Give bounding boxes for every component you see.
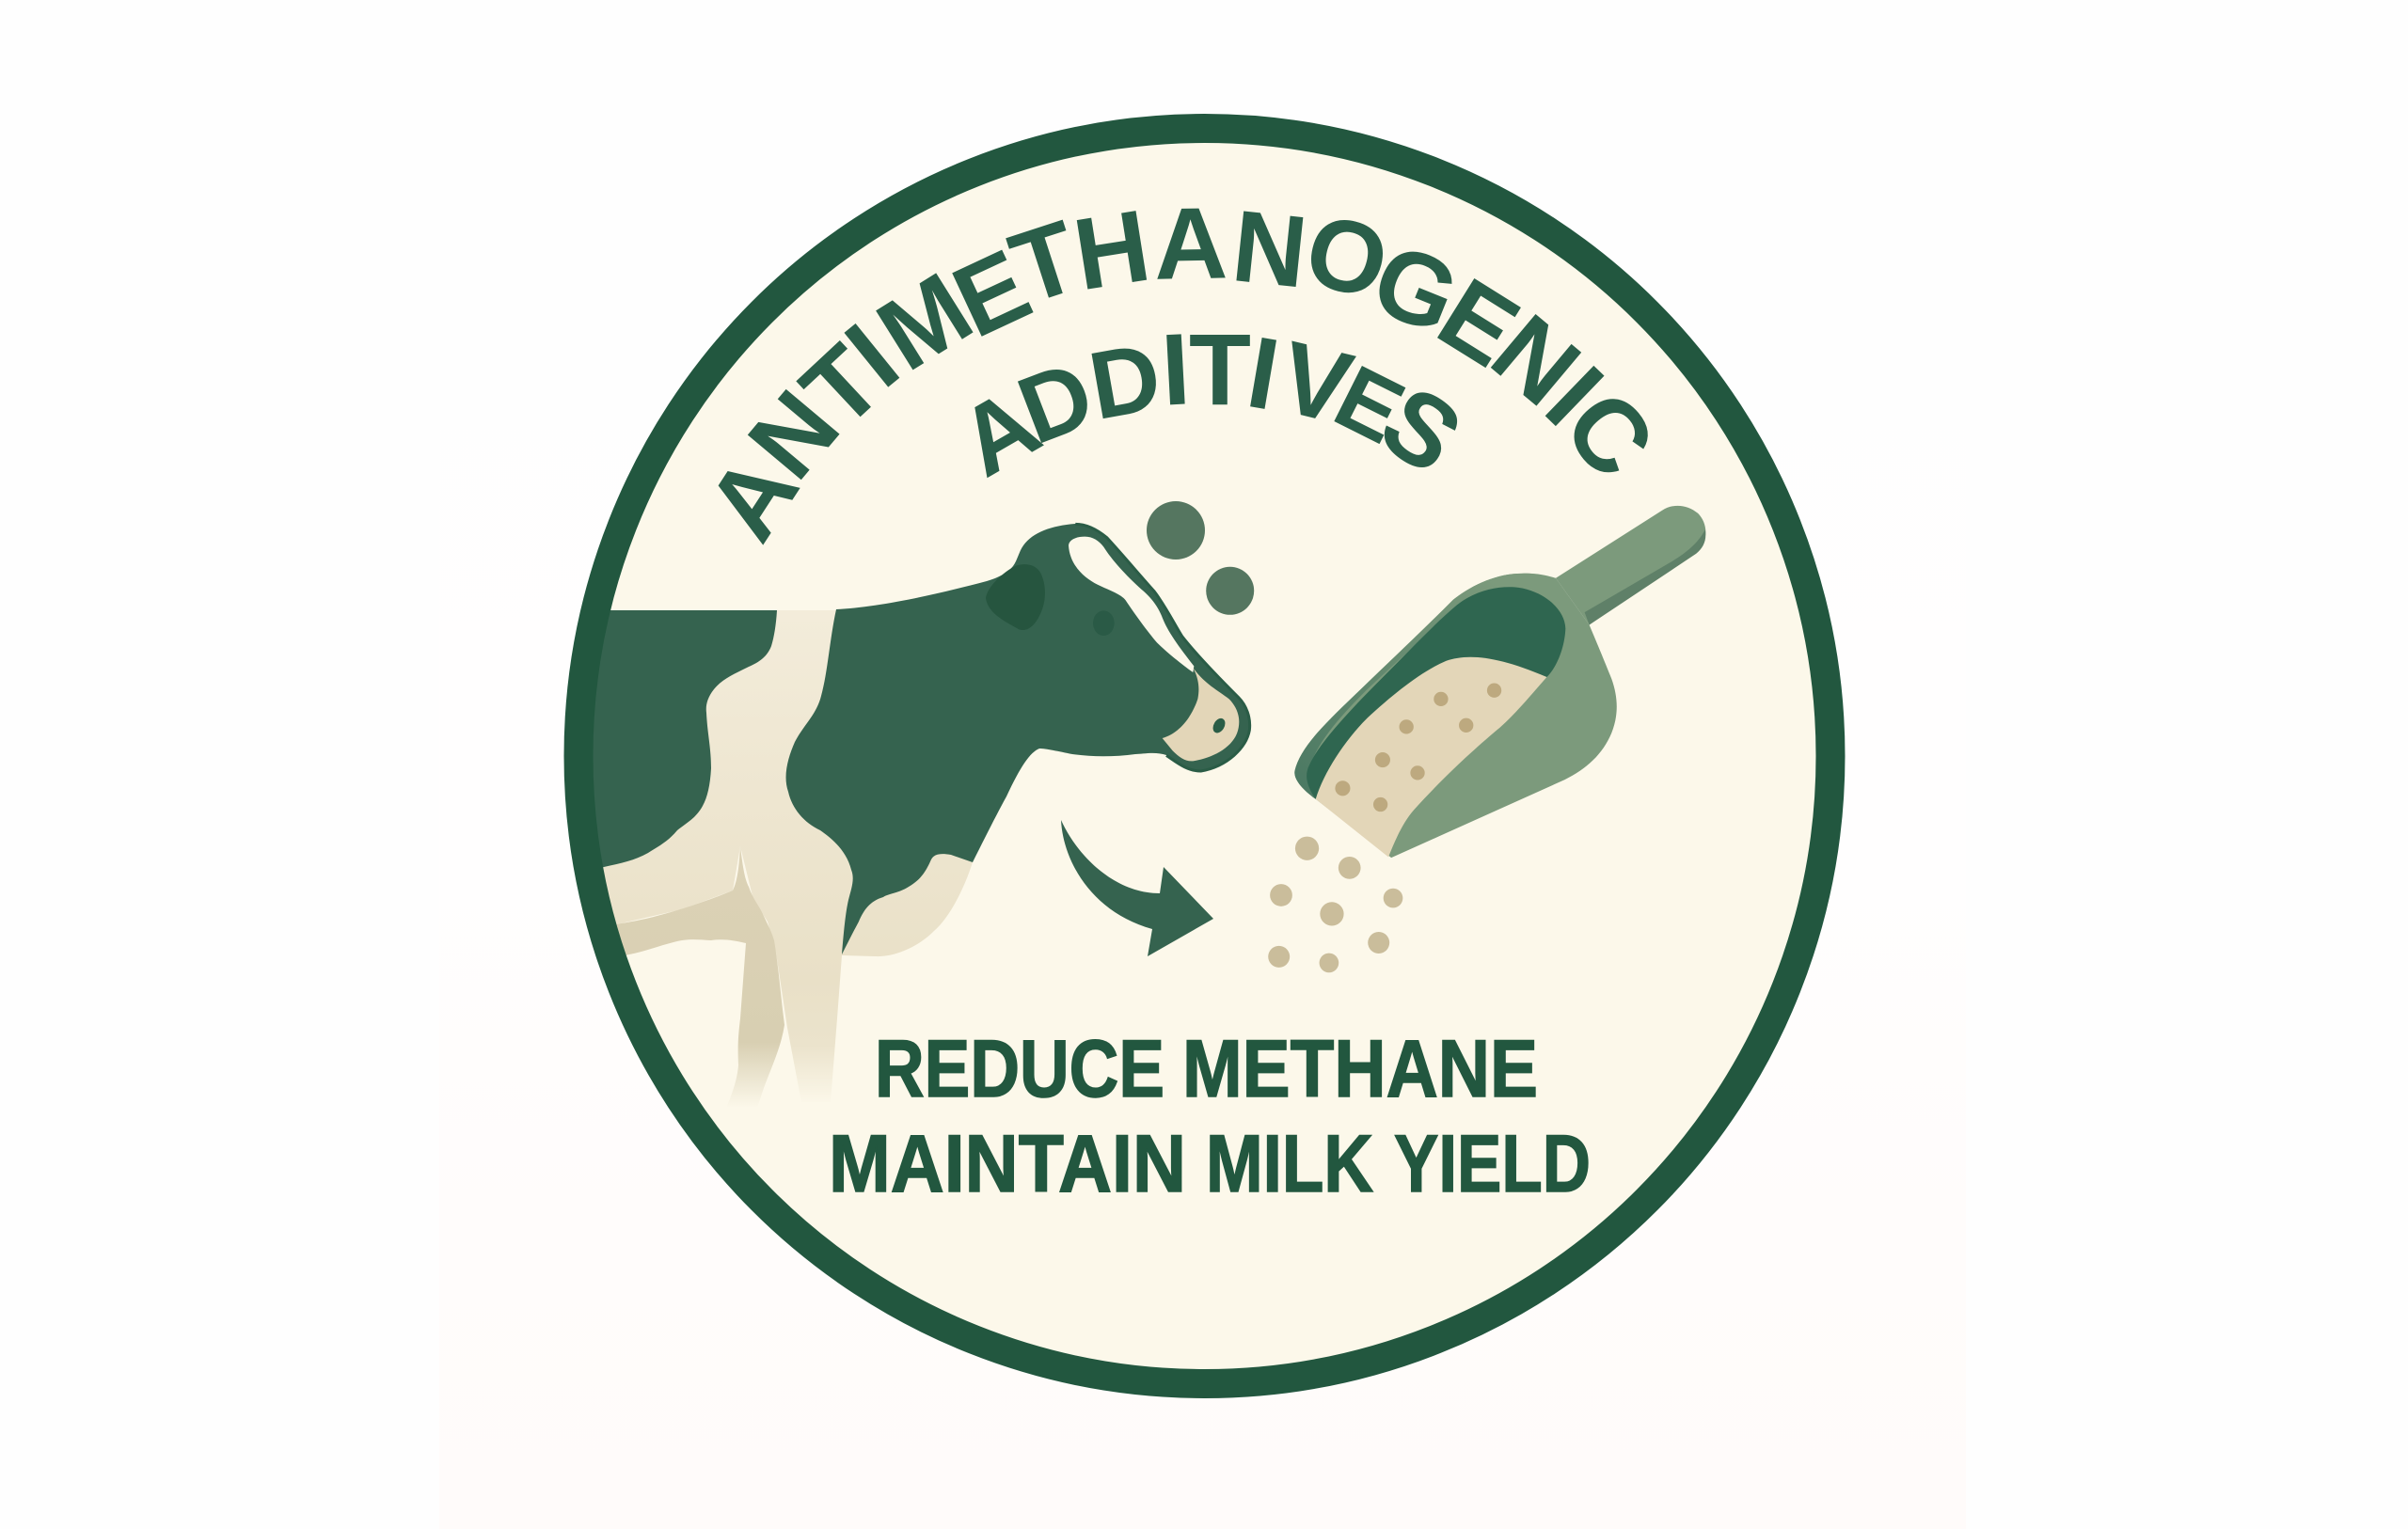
- panel: circular badge: [564, 128, 1830, 1384]
- bubble large: [1147, 501, 1205, 560]
- additive powder: [1316, 657, 1546, 857]
- cow shaded back leg: [617, 847, 784, 1098]
- badge cream disc: [578, 128, 1830, 1384]
- message two: YIELD: [1394, 1119, 1591, 1209]
- scoop body: [1294, 574, 1617, 858]
- badge outer ring: [578, 128, 1830, 1384]
- muzzle: [1163, 668, 1239, 761]
- message two: MAINTAIN: [829, 1119, 1186, 1209]
- illustration: cow: [564, 524, 1250, 1108]
- cow front dark patch and head: [786, 524, 1250, 954]
- cow cream body and front leg: [603, 610, 973, 1089]
- badge infographic: [564, 114, 1846, 1398]
- head outline: [1075, 524, 1250, 771]
- illustration: feed scoop: [1268, 506, 1705, 972]
- scoop interior: [1307, 587, 1565, 799]
- bubble small: [1206, 567, 1254, 615]
- arrow: additive to cow: [1061, 820, 1213, 956]
- ear: [986, 564, 1045, 630]
- message one: METHANE: [1182, 1024, 1538, 1114]
- falling grains: [1268, 837, 1402, 972]
- heading line one: ANTIMETHANOGENIC: [685, 185, 1677, 559]
- white face blaze: [1069, 537, 1194, 672]
- title: curved heading: [685, 185, 1677, 559]
- eye: [1093, 610, 1115, 636]
- handle shadow: [1585, 529, 1705, 625]
- page background panel: [439, 0, 1966, 1529]
- heading line two: ADDITIVES: [942, 311, 1482, 497]
- text: key messages: [829, 1024, 1591, 1209]
- message two: MILK: [1206, 1119, 1373, 1209]
- cow rear dark patch: [593, 610, 777, 867]
- nostril: [1213, 718, 1225, 733]
- scoop rim: [1294, 574, 1556, 799]
- message one: REDUCE: [875, 1024, 1164, 1114]
- cow head details: [986, 524, 1250, 771]
- scoop handle: [1556, 506, 1705, 625]
- icon: methane bubbles: [1147, 501, 1254, 615]
- powder grains in scoop: [1335, 684, 1501, 812]
